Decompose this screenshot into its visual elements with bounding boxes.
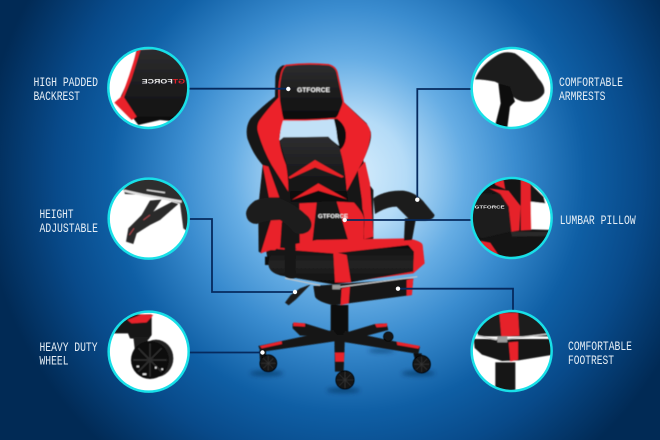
inset: armrest: [472, 48, 552, 128]
chair: [246, 64, 435, 393]
label: high padded backrest: [34, 75, 98, 104]
label: comfortable footrest: [568, 339, 632, 368]
label: lumbar pillow: LUMBAR PILLOW: [560, 213, 636, 228]
label: comfortable armrests: COMFORTABLE: [559, 75, 623, 90]
label: high padded backrest: BACKREST: [34, 89, 80, 104]
inset: footrest: [469, 310, 555, 392]
label: height adjustable: [40, 207, 98, 236]
label: comfortable armrests: [559, 75, 623, 104]
armrests and posts: [246, 191, 435, 279]
label: heavy duty wheel: WHEEL: [40, 354, 68, 368]
logo: GTFORCE: [475, 205, 505, 211]
label: comfortable footrest: FOOTREST: [568, 353, 614, 368]
logo: headrest: GTFORCE: [297, 88, 330, 94]
casters: [260, 332, 430, 389]
seat and base: [258, 220, 430, 389]
label: comfortable footrest: COMFORTABLE: [568, 339, 632, 354]
callout dots: [260, 87, 419, 355]
inset: wheel: [109, 312, 189, 392]
chair back: [247, 64, 373, 263]
mirrored logo: GTFORCE: [142, 79, 185, 85]
label: heavy duty wheel: [40, 340, 98, 368]
callout line: wheel: [189, 352, 262, 354]
label: comfortable armrests: ARMRESTS: [559, 89, 606, 104]
callout line: backrest: [189, 88, 288, 90]
logo: lumbar pillow: GTFORCE: [318, 214, 348, 220]
label: high padded backrest: HIGH PADDED: [34, 75, 98, 90]
inset: lumbar pillow: [472, 178, 554, 258]
floor shadows: [250, 349, 435, 393]
label: heavy duty wheel: HEAVY DUTY: [40, 340, 98, 355]
inset: backrest: [108, 47, 193, 130]
label: height adjustable: ADJUSTABLE: [40, 221, 98, 236]
inset: height lever: [109, 177, 190, 259]
callout line: lumbar pillow: [345, 219, 471, 221]
callout line: armrests: [417, 89, 471, 199]
callout line: height adjustable: [189, 219, 295, 292]
label: height adjustable: HEIGHT: [40, 207, 74, 222]
callout line: footrest: [398, 289, 513, 311]
